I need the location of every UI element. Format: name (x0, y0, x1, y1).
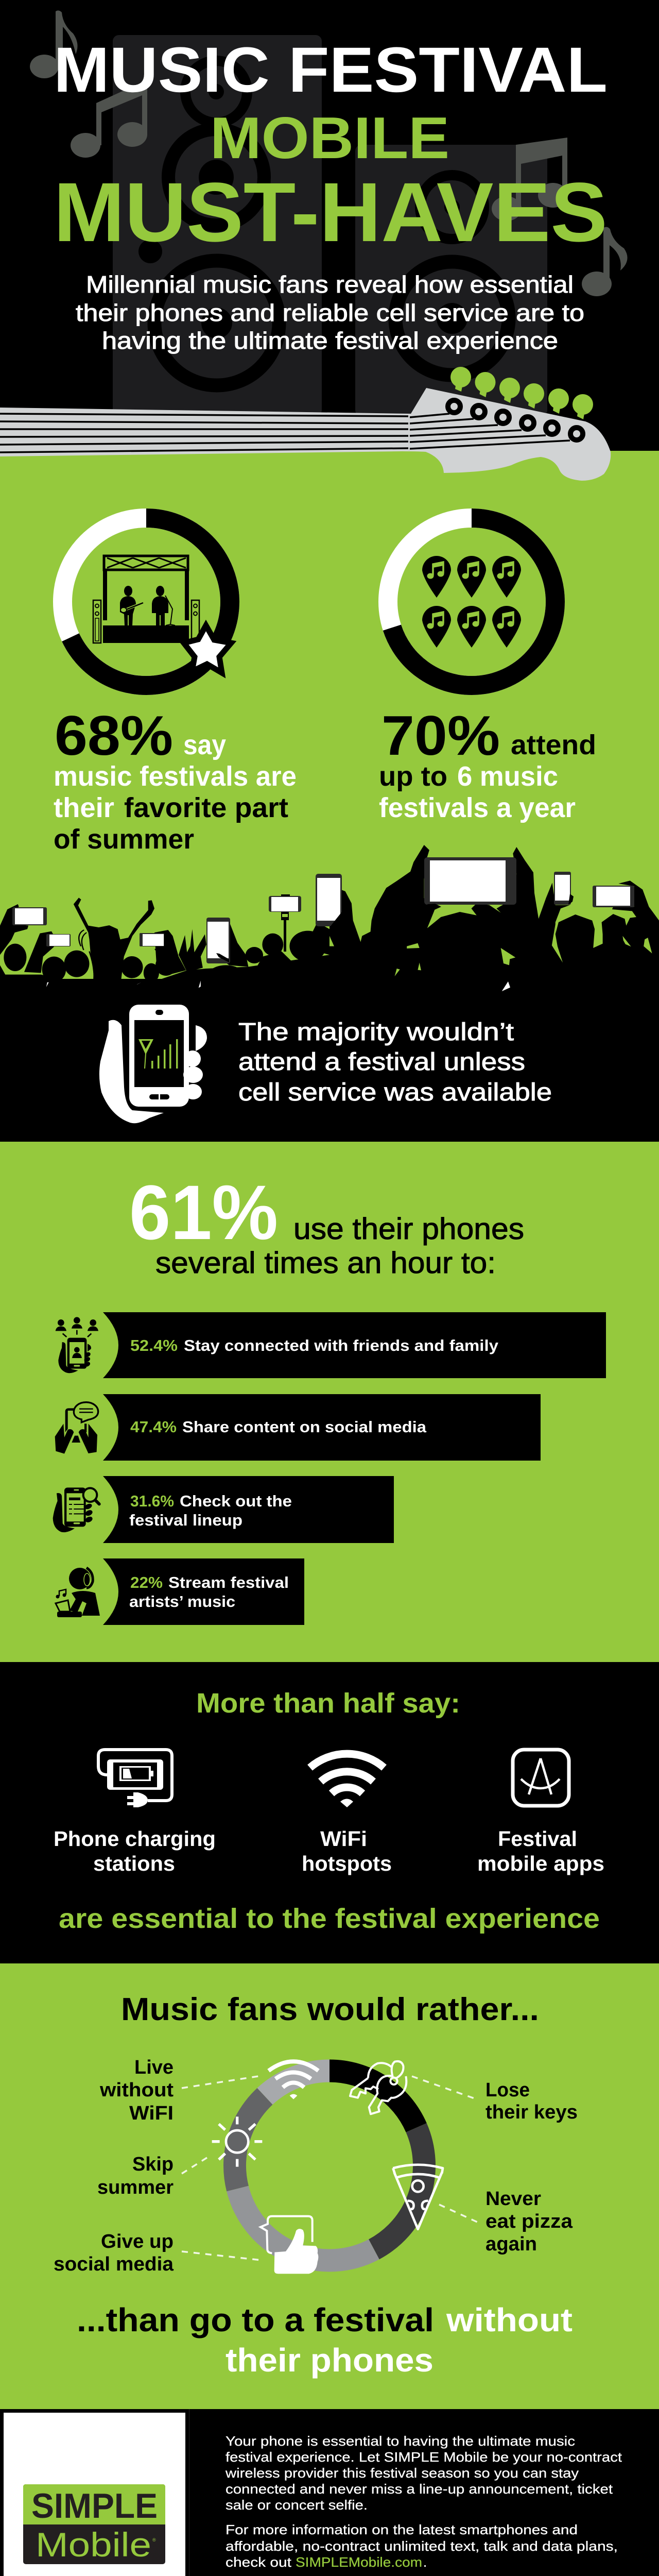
label: give up social media: Give up (101, 2231, 174, 2252)
label: live without wifi (99, 2057, 174, 2124)
title: MOBILE (210, 106, 449, 171)
background speakers (113, 35, 547, 416)
icon: charging tablet (98, 1750, 172, 1807)
panel: hero header (0, 0, 659, 481)
label: wifi hotspots: hotspots (302, 1852, 392, 1875)
footer copy: sale or concert selfie. (226, 2497, 368, 2513)
bar: 22 percent stream music: 22% (130, 1573, 163, 1591)
panel: music fans would rather (0, 1963, 659, 2409)
label: live without wifi: without (99, 2079, 174, 2101)
icon: hand holding phone with signal (99, 1005, 207, 1123)
bar: 47.4 percent share content: Share content on social media (182, 1418, 427, 1436)
label: give up social media: social media (54, 2253, 174, 2275)
footer copy: Your phone is essential to having the ultimate music (226, 2433, 575, 2449)
panel: footer (0, 2409, 659, 2576)
bar: 31.6 percent check lineup: 31.6% (130, 1492, 174, 1510)
donut chart: 70 percent with location pins (388, 518, 555, 685)
subtitle: having the ultimate festival experience (102, 327, 558, 354)
label: skip summer: summer (97, 2177, 174, 2198)
text: majority wouldn't attend without service: attend a festival unless (238, 1048, 525, 1076)
logo panel (4, 2413, 185, 2576)
icon: sun (212, 2116, 262, 2167)
footer copy: connected and never miss a line-up announcement, ticket (226, 2481, 613, 2497)
label: skip summer (97, 2154, 174, 2198)
stat: 68 percent favorite part of summer: music festivals are (54, 761, 297, 792)
bar: 31.6 percent check lineup: Check out the (180, 1492, 292, 1510)
title: MUSIC FESTIVAL (54, 35, 608, 106)
icon: listener with headphones (56, 1568, 100, 1617)
closing line: their phones (226, 2342, 433, 2379)
label: lose their keys: Lose (485, 2079, 530, 2101)
icon: thumbs up with speech bubble (261, 2216, 318, 2274)
label: wifi hotspots: WiFi (320, 1827, 367, 1851)
illustration: crowd silhouette with phones (0, 845, 659, 1010)
label: festival mobile apps: mobile apps (477, 1852, 604, 1875)
stat: 70 percent attend up to 6 festivals: 6 music (457, 761, 558, 792)
logo: SIMPLE Mobile: ® (152, 2537, 156, 2543)
title: MUST-HAVES (54, 165, 608, 259)
phones held up (12, 857, 634, 963)
logo: SIMPLE Mobile: Mobile (36, 2526, 151, 2564)
bar: 22 percent stream music: Stream festival (168, 1573, 289, 1591)
heading: 61 percent: use their phones (293, 1212, 524, 1246)
bar: 47.4 percent share content: 47.4% (130, 1418, 177, 1436)
icon: festival mobile app (513, 1750, 569, 1806)
label: phone charging stations: stations (93, 1852, 175, 1875)
icon: festival stage (93, 556, 199, 643)
subtitle: their phones and reliable cell service are to (76, 299, 584, 326)
label: wifi hotspots (302, 1827, 392, 1875)
stat: 68 percent favorite part of summer: say (183, 730, 226, 760)
heading: 61 percent (129, 1169, 524, 1280)
footer copy: affordable, no-contract unlimited text, talk and data plans, (226, 2538, 618, 2554)
crowd left half (0, 897, 330, 1010)
text: majority wouldn't attend without service: The majority wouldn’t (238, 1019, 514, 1046)
stat: 68 percent favorite part of summer (54, 704, 297, 855)
stat: 70 percent attend up to 6 festivals: 70% (381, 704, 500, 767)
title (54, 35, 608, 259)
icon: star (184, 625, 231, 673)
guitar tuners (448, 400, 583, 440)
bar: 52.4 percent stay connected (103, 1312, 606, 1378)
footer copy: wireless provider this festival season so you can stay (225, 2465, 579, 2481)
stat: 68 percent favorite part of summer: their (54, 792, 114, 823)
footer copy (225, 2433, 622, 2570)
icon: wifi (310, 1754, 384, 1807)
panel: survey statistics on green (0, 451, 659, 981)
bar: 22 percent stream music: artists’ music (129, 1592, 235, 1611)
stat: 70 percent attend up to 6 festivals: up to (379, 761, 447, 792)
label: live without wifi: WiFI (129, 2103, 174, 2124)
label: skip summer: Skip (132, 2154, 174, 2175)
bar: 31.6 percent check lineup: festival lineup (129, 1511, 242, 1529)
logo: SIMPLE Mobile: SIMPLE (31, 2486, 158, 2526)
donut chart: 68 percent with stage icon (63, 518, 231, 685)
stat: 68 percent favorite part of summer: 68% (55, 704, 173, 767)
bar: 22 percent stream music (103, 1558, 304, 1625)
stat: 70 percent attend up to 6 festivals: attend (511, 730, 596, 760)
icon: pizza slice (393, 2165, 443, 2229)
label: live without wifi: Live (134, 2057, 174, 2078)
text: majority wouldn't attend without service: cell service was available (238, 1079, 552, 1106)
heading: Music fans would rather... (121, 1992, 539, 2027)
footer copy: SIMPLEMobile.com (296, 2554, 422, 2570)
panel: crowd and cell service callout (0, 845, 659, 1142)
label: festival mobile apps (477, 1827, 604, 1875)
crowd right half (330, 845, 659, 1010)
icon: signal bars (138, 1039, 178, 1069)
bar: 52.4 percent stay connected: Stay connected with friends and family (184, 1336, 499, 1354)
subtitle: Millennial music fans reveal how essential (86, 271, 574, 298)
heading: More than half say: (196, 1688, 460, 1719)
stat: 68 percent favorite part of summer: of summer (54, 824, 194, 855)
icon: phone with magnifier (53, 1487, 99, 1532)
closing line: are essential to the festival experience (59, 1903, 600, 1934)
label: phone charging stations: Phone charging (54, 1827, 216, 1851)
icon: wifi on ring (269, 2061, 318, 2099)
panel: more than half say (0, 1662, 659, 1963)
label: never eat pizza again: Never (485, 2188, 541, 2210)
stat: 68 percent favorite part of summer: favorite part (124, 792, 288, 823)
guitar strings (0, 414, 570, 452)
hands over phones (154, 894, 574, 962)
background music notes (30, 10, 628, 296)
bar: 47.4 percent share content (103, 1394, 541, 1461)
footer copy: check out (226, 2554, 292, 2570)
illustration: guitar neck and headstock (0, 367, 611, 481)
logo: SIMPLE Mobile (23, 2484, 165, 2564)
stat: 70 percent attend up to 6 festivals: festivals a year (379, 792, 576, 823)
bar: 52.4 percent stay connected: 52.4% (130, 1336, 178, 1354)
ring chart: five segments (235, 2071, 424, 2260)
dashed connector lines (182, 2076, 477, 2260)
label: lose their keys: their keys (485, 2102, 578, 2123)
label: never eat pizza again: again (485, 2233, 537, 2255)
icon: friends and family phone (56, 1317, 98, 1373)
heading: 61 percent: several times an hour to: (155, 1246, 496, 1280)
label: phone charging stations (54, 1827, 216, 1875)
label: festival mobile apps: Festival (498, 1827, 577, 1851)
bar: 31.6 percent check lineup (103, 1476, 394, 1543)
icon: six music pins (422, 556, 521, 648)
label: never eat pizza again: eat pizza (485, 2211, 573, 2232)
label: lose their keys (485, 2079, 578, 2123)
closing line: without (446, 2301, 573, 2338)
stat: 70 percent attend up to 6 festivals (379, 704, 596, 823)
footer copy: For more information on the latest smartphones and (226, 2522, 578, 2537)
closing line (77, 2301, 573, 2379)
subtitle (76, 271, 584, 354)
panel: 61 percent phone use (0, 1142, 659, 1662)
footer copy: . (423, 2554, 427, 2570)
label: give up social media (54, 2231, 174, 2275)
footer copy: festival experience. Let SIMPLE Mobile be your no-contract (226, 2449, 622, 2465)
icon: hands sharing on social media (55, 1402, 98, 1454)
closing line: ...than go to a festival (77, 2301, 434, 2338)
heading: 61 percent: 61% (129, 1169, 278, 1256)
text: majority wouldn't attend without service (238, 1019, 552, 1106)
icon: keys (350, 2061, 406, 2114)
guitar pegs (450, 367, 593, 419)
label: never eat pizza again (485, 2188, 573, 2255)
